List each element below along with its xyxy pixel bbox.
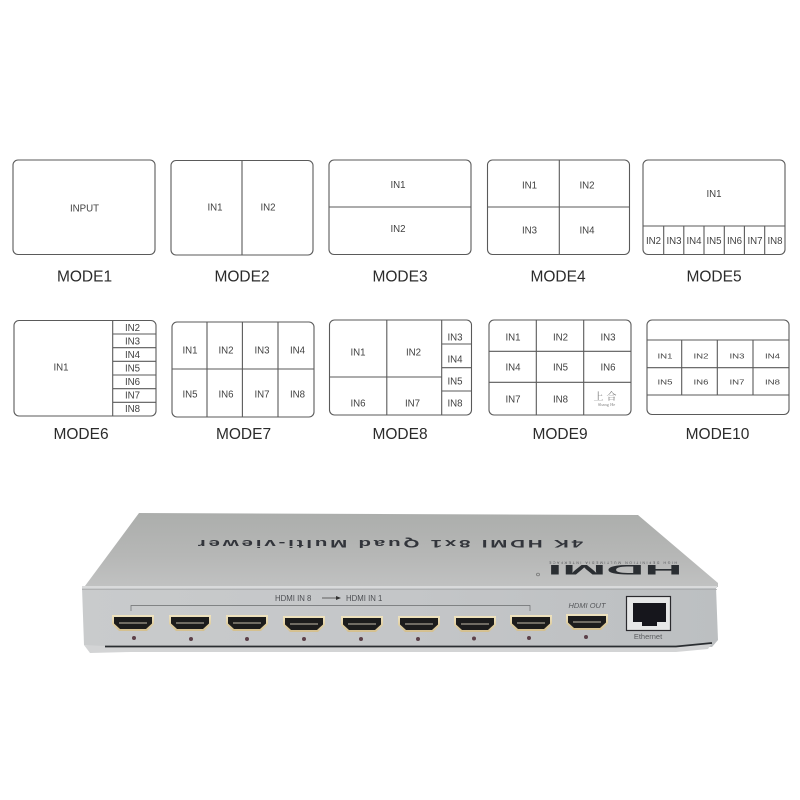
panel: mode 7 layout: IN7 [254,390,270,400]
label: MODE6: MODE6 [53,426,109,443]
input range label: HDMI IN 1 [346,594,382,603]
panel: mode 5 layout: IN1 [706,189,722,200]
panel: mode 10 layout: IN3 [730,352,744,360]
device front face [82,587,718,647]
panel: mode 9 layout: IN3 [600,332,616,344]
panel: mode 10 layout: IN7 [730,378,744,386]
panel: mode 8 layout: IN4 [447,354,463,366]
panel: mode 4 layout: IN1 [522,180,537,192]
panel: mode 9 layout: IN7 [505,394,521,406]
label: MODE10: MODE10 [686,426,750,443]
HDMI output port [566,614,608,630]
panel: mode 8 layout: IN8 [447,398,463,410]
panel: mode 7 layout: IN2 [218,346,234,356]
panel: mode 4 layout: IN4 [579,226,595,236]
label: MODE7: MODE7 [216,426,271,443]
printed HDMI logo (upside down): HIGH DEFINITION MULTIMEDIA INTERFACE [548,560,677,564]
panel: mode 6 layout: IN7 [125,390,140,402]
panel: mode 6 layout: IN1 [53,362,69,374]
printed HDMI logo (upside down): HDMI [548,562,682,578]
panel: mode 7 layout: IN8 [290,390,305,400]
label: MODE4: MODE4 [530,268,586,286]
panel: mode 7 layout: IN4 [290,346,306,356]
panel: mode 10 layout: IN6 [694,378,708,386]
panel: mode 3 layout: IN1 [390,180,406,191]
panel: mode 1 layout: INPUT [70,204,99,214]
input range label [275,594,382,603]
panel: mode 9 layout: IN6 [600,362,616,374]
panel: mode 4 layout: IN3 [522,226,537,236]
panel: mode 7 layout: IN3 [254,346,270,356]
panel: mode 6 layout: IN5 [125,364,140,374]
panel: mode 10 layout: IN5 [658,378,672,386]
panel: mode 2 layout [171,160,313,255]
panel: mode 10 layout: IN1 [658,352,672,360]
panel: mode 6 layout: IN4 [125,350,141,361]
panel: mode 8 layout: IN2 [406,348,421,358]
panel: mode 8 layout: IN7 [405,398,420,410]
panel: mode 8 layout: IN5 [447,376,463,388]
panel: mode 9 layout: IN5 [553,362,568,374]
panel: mode 5 layout: IN3 [666,236,682,247]
panel: mode 3 layout [329,160,471,254]
Ethernet port [626,596,670,630]
HDMI input port 8 [112,615,154,631]
label: MODE2: MODE2 [214,268,270,286]
HDMI input port 5 [283,616,325,632]
watermark: Shang He: Shang He [598,402,615,407]
panel: mode 5 layout: IN5 [706,236,722,247]
panel: mode 6 layout: IN2 [125,323,140,334]
panel: mode 8 layout [330,320,472,415]
HDMI input port 2 [454,616,496,632]
panel: mode 5 layout: IN6 [727,236,742,247]
panel: mode 4 layout [488,160,630,254]
panel: mode 1 layout [13,160,155,254]
panel: mode 9 layout: IN4 [505,362,521,374]
panel: mode 10 layout: IN4 [765,352,780,360]
panel: mode 9 layout: IN8 [553,394,568,406]
HDMI input port 4 [341,616,383,632]
panel: mode 6 layout: IN6 [125,377,140,388]
label: MODE9: MODE9 [532,426,588,443]
device bottom lip [84,643,712,653]
status LEDs [132,635,588,641]
input bracket line [131,606,530,611]
panel: mode 10 layout: IN8 [765,378,780,386]
label: MODE5: MODE5 [686,268,742,286]
panel: mode 8 layout: IN3 [447,332,463,344]
Ethernet label: Ethernet [634,632,663,641]
panel: mode 4 layout: IN2 [579,180,595,192]
panel: mode 9 layout [489,320,631,415]
panel: mode 5 layout [643,160,785,254]
panel: mode 8 layout: IN6 [350,398,366,410]
HDMI input port 3 [398,616,440,632]
device: HDMI multi-viewer [82,513,718,653]
input range label: HDMI IN 8 [275,594,311,603]
panel: mode 7 layout: IN5 [182,390,198,400]
panel: mode 7 layout: IN6 [218,390,234,400]
panel: mode 5 layout: IN2 [646,236,661,247]
watermark: Shang He: 上合 [594,388,620,403]
panel: mode 10 layout [647,320,789,414]
panel: mode 6 layout: IN3 [125,336,140,348]
HDMI input port 1 [510,615,552,631]
panel: mode 7 layout [172,322,314,417]
label: MODE3: MODE3 [372,268,428,286]
panel: mode 3 layout: IN2 [390,224,406,235]
panel: mode 5 layout: IN8 [767,236,783,247]
panel: mode 2 layout: IN1 [207,202,223,214]
panel: mode 10 layout: IN2 [694,352,708,360]
panel: mode 6 layout [14,320,156,416]
label: MODE1: MODE1 [57,268,112,286]
panel: mode 6 layout: IN8 [125,404,140,415]
device top face [82,513,718,590]
label: MODE8: MODE8 [372,426,428,443]
panel: mode 9 layout: IN2 [553,332,568,344]
printed HDMI logo (upside down) [536,560,682,578]
panel: mode 2 layout: IN2 [260,202,276,214]
panel: mode 7 layout: IN1 [182,346,198,356]
panel: mode 5 layout: IN7 [747,236,763,247]
HDMI OUT label: HDMI OUT [568,601,607,610]
HDMI input port 7 [169,615,211,631]
HDMI input port 6 [226,615,268,631]
printed title (upside down): 4K HDMI 8x1 Quad Multi-viewer [195,537,583,549]
panel: mode 5 layout: IN4 [686,236,702,247]
panel: mode 8 layout: IN1 [350,348,366,358]
panel: mode 9 layout: IN1 [505,332,521,344]
